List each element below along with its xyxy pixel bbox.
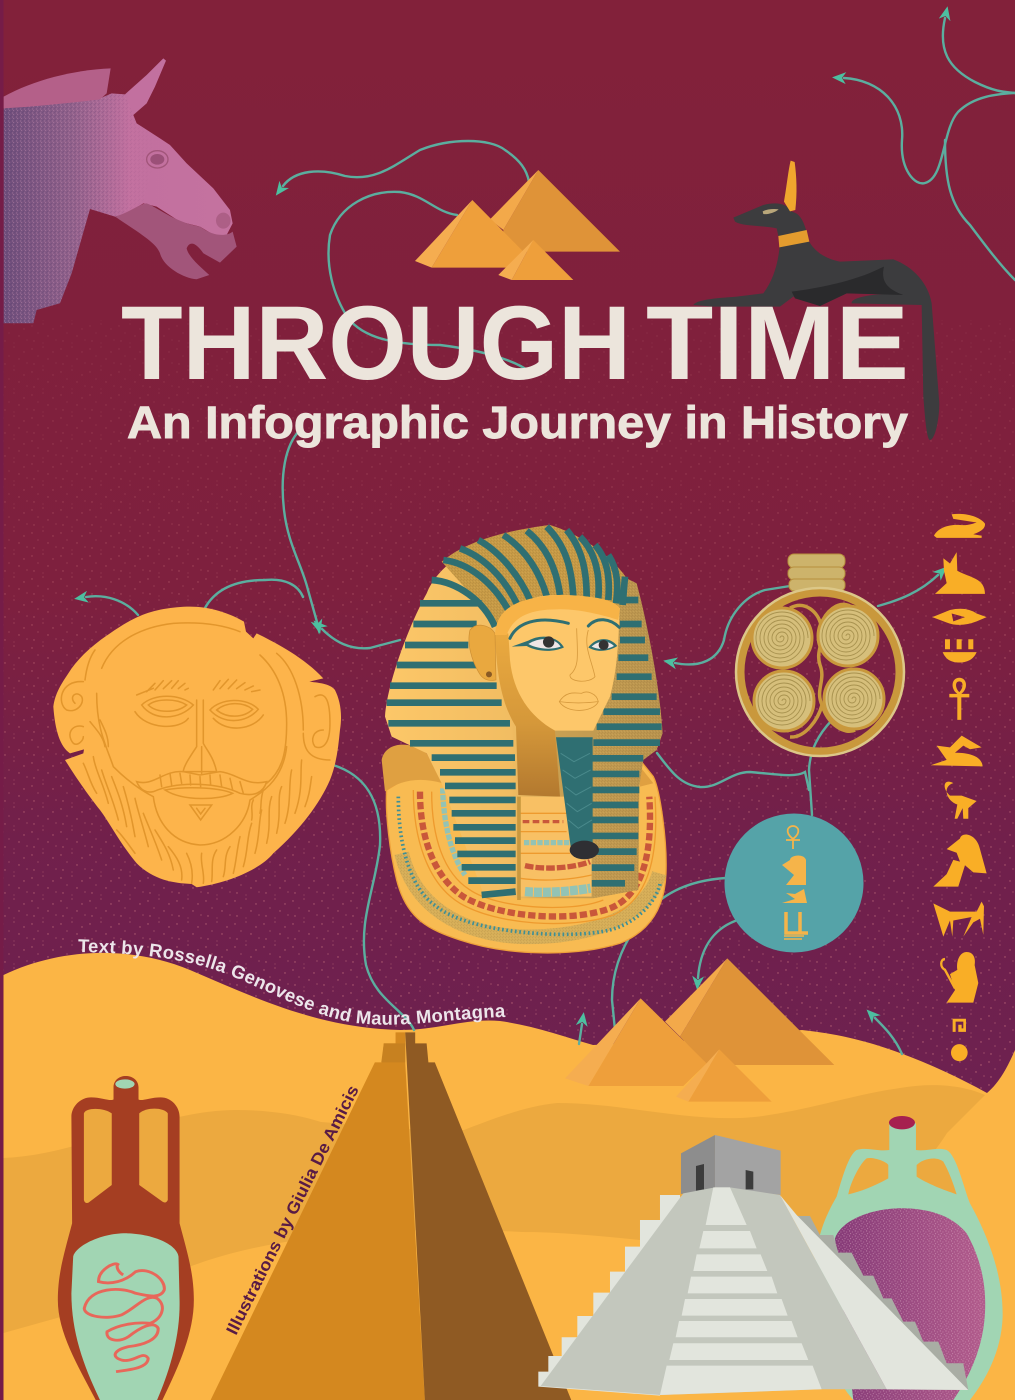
amphora belly	[71, 1233, 180, 1400]
arrow: circle to pyramid	[612, 878, 726, 1030]
amphora right handle gap	[139, 1109, 168, 1203]
arrow: mask to pyramid	[333, 765, 414, 1030]
nose and lips	[559, 628, 598, 710]
arrow: tut to medallion	[657, 753, 809, 790]
temple hut left face	[681, 1135, 715, 1194]
icon: Tutankhamun mask	[382, 525, 666, 953]
right eye white	[592, 642, 614, 649]
horse speckle	[4, 94, 144, 324]
chest red row one	[523, 817, 563, 827]
arrow: medallion to glyphs	[878, 575, 938, 606]
icon: red amphora	[58, 1076, 194, 1400]
chest red row two	[525, 862, 590, 868]
chest teal row one	[524, 835, 570, 851]
brows	[510, 620, 619, 638]
left spine strip	[0, 0, 4, 1400]
temple right light face	[780, 1195, 968, 1390]
amphora squiggle	[84, 1264, 164, 1372]
large pyramid	[503, 170, 620, 252]
disc ankh	[786, 826, 800, 849]
arrow: small sand up	[579, 1024, 582, 1044]
arrow: title down to tut	[283, 430, 317, 622]
stippled dots	[0, 320, 1015, 1100]
pyramid left side	[211, 1032, 425, 1400]
mask engraved lines	[61, 623, 330, 883]
arrow: right edge curve	[945, 140, 1015, 280]
arrow: pyramid to left	[283, 141, 529, 186]
jug belly dots	[835, 1208, 985, 1400]
icon: gold medallion	[736, 554, 904, 756]
horse jaw	[115, 203, 237, 279]
desert dunes	[4, 953, 1015, 1400]
arrow: right sand	[875, 1018, 902, 1054]
left eye white	[528, 639, 561, 649]
small pyramid	[688, 1049, 772, 1102]
arrows	[86, 18, 1015, 1054]
glyph: eye	[932, 609, 987, 625]
teal tile row	[443, 788, 465, 875]
dark dune band	[4, 1085, 985, 1333]
small pyramid light side	[498, 240, 533, 280]
teal circle with glyphs	[724, 814, 864, 952]
speckled outer band	[402, 853, 659, 937]
icon: lower pyramids	[565, 958, 834, 1102]
jug left handle gap	[848, 1158, 888, 1194]
medallion ring edge	[736, 588, 904, 756]
chest teal row two	[525, 888, 591, 892]
nemes crown	[442, 525, 627, 623]
author credit on curve	[78, 952, 505, 1025]
temple doors	[696, 1164, 753, 1191]
middle pyramid light side	[415, 200, 472, 268]
glyph: dog	[933, 902, 984, 937]
glyph: seated figure	[933, 834, 987, 887]
icon: horse head	[4, 58, 237, 323]
chest side strand	[513, 797, 524, 900]
glyph: small ankh	[941, 959, 955, 988]
nemes headdress	[385, 525, 663, 898]
arrow: into mask from tut	[322, 629, 400, 648]
large pyramid light side	[665, 958, 727, 1037]
headband	[495, 595, 620, 635]
icon: green jug	[815, 1116, 1003, 1400]
left shoulder	[382, 745, 443, 792]
jackal body	[693, 203, 939, 440]
red tile row	[420, 792, 650, 916]
icon: Mayan temple	[538, 1135, 968, 1396]
chest orange lines	[520, 813, 592, 880]
glyph: ankh	[949, 678, 969, 720]
beard	[556, 737, 593, 847]
hieroglyph column	[931, 514, 987, 1061]
jackal ear	[784, 161, 797, 211]
jug lip	[889, 1116, 915, 1129]
title	[121, 285, 909, 402]
pyramid second step	[381, 1043, 405, 1062]
large pyramid	[680, 958, 834, 1065]
orange line	[413, 790, 656, 924]
amphora left handle gap	[84, 1109, 112, 1203]
medallion filigree	[790, 604, 855, 737]
glyph: dot	[951, 1044, 968, 1061]
icon: Agamemnon gold mask	[53, 607, 341, 887]
subtitle: An Infographic Journey in History	[127, 397, 908, 448]
horse eye	[147, 151, 168, 168]
glyph: bowl and bars	[943, 639, 977, 662]
small pyramid light side	[676, 1049, 719, 1102]
ear	[469, 625, 496, 680]
glyph: sphinx	[935, 552, 985, 594]
horse mane	[4, 68, 111, 108]
coin top left	[752, 608, 812, 668]
arrow: mask top left	[86, 596, 138, 615]
coin top right	[818, 606, 878, 666]
chest panel	[518, 797, 592, 897]
disc seated figure	[782, 855, 806, 885]
icon: upper pyramids	[415, 170, 620, 280]
collar base	[386, 760, 666, 953]
pyramid right side	[405, 1032, 571, 1400]
jackal eye	[763, 209, 779, 214]
coin bottom left	[754, 671, 814, 731]
temple hut right face	[715, 1135, 781, 1195]
temple left steps	[538, 1195, 687, 1396]
arrow: top right up	[943, 18, 1015, 93]
amphora body	[58, 1076, 194, 1400]
nemes stripes	[387, 527, 662, 895]
temple stairs	[660, 1187, 822, 1395]
light sand	[4, 953, 1015, 1400]
band grain	[402, 853, 659, 937]
mask plate	[53, 607, 341, 887]
glyph: bird	[945, 782, 977, 819]
icon: Anubis jackal	[693, 161, 939, 440]
right pupil	[599, 640, 609, 650]
medallion top stack	[788, 554, 845, 591]
title: THROUGH	[121, 285, 631, 402]
neck shadow	[495, 633, 560, 797]
left pupil	[543, 636, 554, 648]
beard tip	[570, 841, 599, 859]
arrow: medallion to circle	[809, 720, 832, 815]
horse eye pupil	[150, 154, 164, 165]
jackal collar	[778, 230, 809, 247]
right eye	[588, 639, 617, 651]
large pyramid light side	[490, 170, 538, 230]
illustrator credit: Illustrations by Giulia De Amicis	[223, 1082, 363, 1338]
arrow: medallion to left	[675, 586, 790, 664]
collar bands	[398, 788, 660, 937]
icon: stepped pyramid	[211, 1032, 571, 1400]
jackal belly shadow	[792, 267, 903, 306]
nemes grain	[442, 525, 663, 898]
disc legs	[786, 912, 808, 933]
arrow: top right loop	[844, 78, 1015, 183]
disc jackal	[782, 889, 807, 903]
middle pyramid	[432, 200, 523, 268]
glyph: jackal	[931, 736, 983, 766]
teal disc	[724, 814, 864, 952]
orange inner line	[432, 792, 603, 907]
small pyramid	[512, 240, 573, 280]
teal triangle row	[398, 797, 660, 934]
glyph: square spiral	[953, 1019, 966, 1032]
chest rows	[519, 797, 592, 900]
coin bottom right	[824, 669, 884, 729]
middle pyramid light side	[565, 998, 641, 1086]
title: TIME	[646, 285, 909, 402]
glyph: hare	[934, 514, 985, 538]
earring	[486, 671, 492, 677]
face	[495, 595, 620, 731]
author credit text: Text by Rossella Genovese and Maura Montagna	[78, 939, 506, 1025]
jug belly	[835, 1208, 985, 1400]
arrow: pyramid loop through title	[329, 192, 530, 372]
jug body	[815, 1123, 1003, 1400]
jug right handle gap	[917, 1158, 957, 1194]
disc base	[784, 936, 804, 939]
medallion ring	[740, 592, 900, 752]
arrow: mask arch to centre	[205, 580, 303, 608]
glyph: kneeling figure	[947, 952, 978, 1003]
temple right steps shadow	[797, 1216, 968, 1390]
amphora lip	[115, 1079, 135, 1089]
left eye	[512, 637, 564, 651]
right shoulder	[640, 767, 653, 787]
temple main faces	[541, 1187, 887, 1395]
middle pyramid	[588, 998, 707, 1086]
horse nostril	[216, 213, 231, 229]
beard braid	[561, 753, 592, 828]
horse neck and head	[4, 58, 233, 323]
arrow: circle down	[698, 921, 735, 978]
